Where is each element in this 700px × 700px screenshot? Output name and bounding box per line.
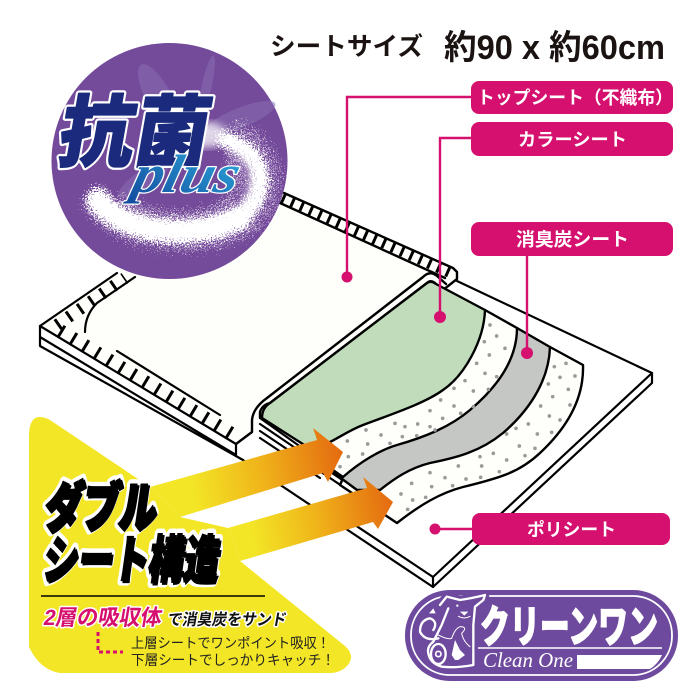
- body text: 上層シートでワンポイント吸収！: [131, 635, 330, 651]
- charcoal sheet: [330, 328, 550, 490]
- leader: poly sheet: [430, 524, 473, 534]
- heading: double sheet structure: シート構造: [41, 534, 225, 592]
- dotted connector: [98, 632, 123, 652]
- stack edge lines: [260, 424, 397, 523]
- subheading: 2層の吸収体: [42, 605, 164, 630]
- label: poly sheet: ポリシート: [527, 519, 616, 540]
- kanji: antibacterial: 抗菌: [53, 90, 218, 177]
- heading: double sheet structure: シート構造: [39, 532, 223, 590]
- logo white bar: [577, 655, 662, 669]
- green colour sheet: [262, 282, 485, 455]
- heading dimensions: 約90 x 約60cm: [444, 29, 665, 67]
- logo pill: [405, 590, 678, 681]
- lower dotted sheet: [340, 347, 583, 523]
- badge glow: [183, 122, 227, 148]
- logo inner ring: [411, 596, 672, 675]
- poly sheet base: [243, 281, 652, 587]
- logo dog: [420, 595, 485, 667]
- sparkle swirl: [92, 130, 271, 241]
- callout divider: [41, 595, 265, 597]
- heading: double sheet structure: ダブル: [42, 479, 163, 540]
- body text: 下層シートでしっかりキャッチ！: [131, 652, 335, 668]
- label: top sheet: [471, 81, 673, 114]
- top sheet folded edge: [236, 273, 446, 444]
- arrow: lower: [228, 477, 393, 561]
- script: plus: plus: [123, 144, 247, 204]
- upper dotted sheet: [310, 310, 517, 477]
- body text: [131, 635, 335, 668]
- heading: double sheet structure: ダブル: [40, 477, 161, 538]
- size heading: [270, 29, 665, 67]
- top sheet: [40, 190, 457, 460]
- subheading: [42, 605, 289, 630]
- logo wordmark: Clean One: [483, 648, 573, 672]
- label: charcoal sheet: [471, 222, 673, 256]
- leader: charcoal sheet: [521, 254, 533, 359]
- callout background: [29, 417, 351, 673]
- label: colour sheet: カラーシート: [518, 130, 627, 150]
- leader: colour sheet: [434, 138, 472, 323]
- badge circle: [52, 43, 288, 279]
- logo rule: [478, 647, 662, 649]
- kanji: antibacterial: 抗菌: [53, 90, 218, 177]
- antibacterial plus badge: [52, 43, 288, 279]
- arrow: upper: [150, 428, 343, 517]
- stack edge line front: [260, 418, 343, 477]
- heading: double sheet structure: ダブル: [40, 477, 161, 538]
- label: poly sheet: [472, 513, 670, 545]
- label: charcoal sheet: 消臭炭シート: [516, 229, 629, 250]
- brand logo: Clean One: [405, 590, 678, 681]
- leader: top sheet: [342, 97, 472, 282]
- label: top sheet: トップシート（不織布）: [477, 88, 673, 108]
- yellow callout panel: [29, 417, 393, 673]
- subheading: で消臭炭をサンド: [166, 610, 288, 629]
- label: colour sheet: [471, 122, 673, 156]
- heading: double sheet structure: シート構造: [39, 532, 223, 590]
- badge petals: [114, 55, 279, 204]
- heading: double sheet structure: [33, 477, 233, 592]
- diagram: layered sheet: [40, 190, 652, 587]
- leader lines and dots: [342, 97, 533, 534]
- heading label: シートサイズ: [270, 32, 423, 61]
